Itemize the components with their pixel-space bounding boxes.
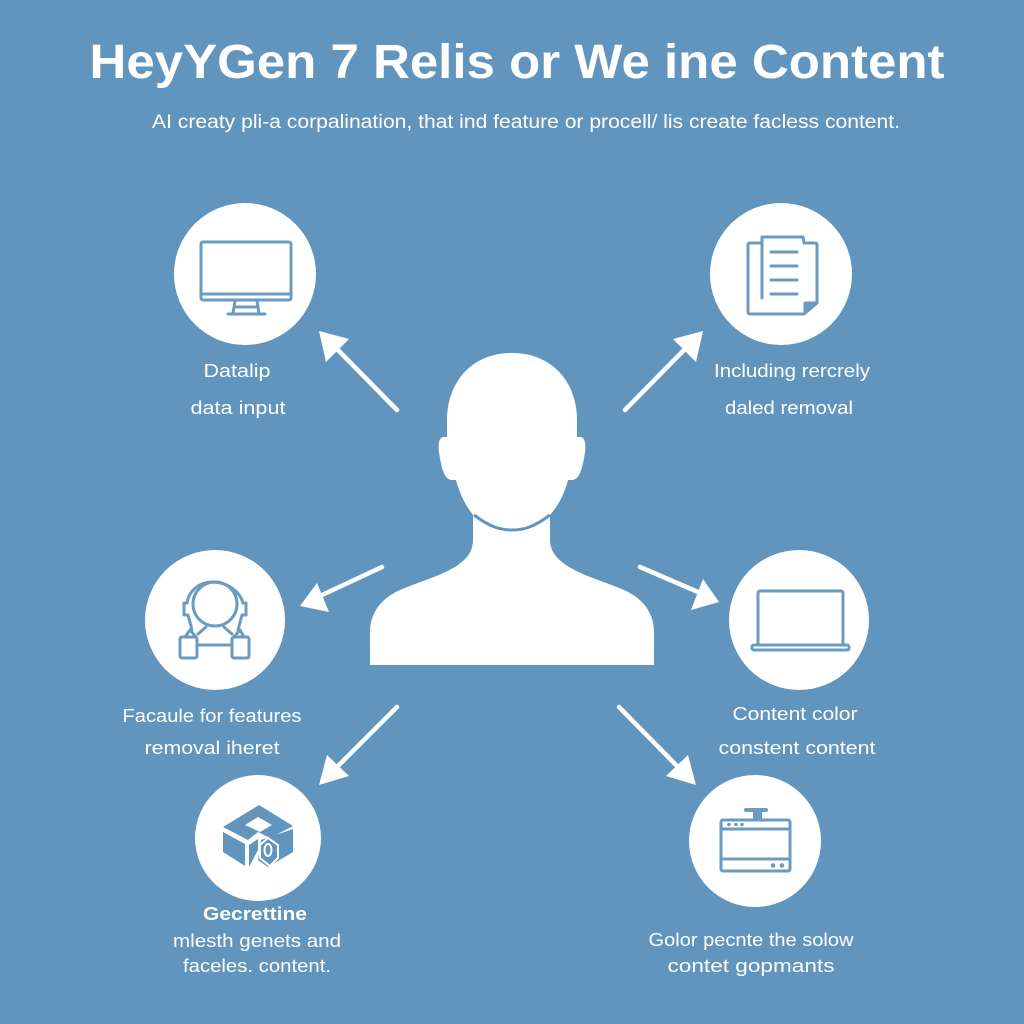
subtitle: AI creaty pli-a corpalination, that ind feature or procell/ lis create facless content. — [152, 112, 900, 133]
arrow: to middle left — [300, 567, 382, 612]
central person silhouette — [370, 353, 654, 665]
label: top left: data input — [190, 398, 286, 418]
icon: headset figure — [180, 582, 249, 658]
panel: bottom right window — [689, 775, 821, 907]
label: top left — [190, 361, 286, 418]
label: top right: daled removal — [725, 398, 853, 418]
icon: box — [223, 805, 293, 867]
title: HeyYGen 7 Relis or We ine Content — [90, 36, 945, 89]
arrow: to bottom left — [319, 707, 397, 785]
arrow: to bottom right — [619, 707, 696, 785]
icon: documents — [748, 237, 817, 314]
arrow: to top right — [625, 331, 703, 410]
label: middle left: removal iheret — [144, 738, 280, 758]
label: middle left: Facaule for features — [122, 706, 302, 726]
label: middle left — [122, 706, 302, 758]
panel: middle right laptop — [729, 550, 869, 690]
label: middle right: constent content — [718, 738, 876, 758]
arrow: to middle right — [640, 567, 719, 610]
panel: top right documents — [710, 203, 852, 345]
panel: middle left headset figure — [145, 550, 285, 690]
label: middle right — [718, 704, 876, 758]
icon: window — [721, 810, 790, 871]
label: bottom left: mlesth genets and — [173, 931, 341, 951]
arrow: to top left — [319, 331, 397, 410]
label: bottom left — [173, 904, 341, 976]
label: top left: Datalip — [204, 361, 270, 381]
panel: bottom left box — [195, 775, 321, 901]
label: bottom left: faceles. content. — [183, 956, 331, 976]
label: bottom right — [648, 930, 855, 976]
label: top right: Including rercrely — [714, 361, 870, 381]
icon: laptop — [752, 591, 849, 650]
icon: monitor — [201, 242, 291, 314]
label: bottom right: Golor pecnte the solow — [648, 930, 855, 950]
label: top right — [714, 361, 870, 418]
jaw line — [474, 515, 550, 530]
panel: top left monitor — [174, 203, 316, 345]
label: bottom right: contet gopmants — [668, 956, 834, 976]
label: bottom left: Gecrettine — [203, 904, 307, 924]
label: middle right: Content color — [732, 704, 858, 724]
